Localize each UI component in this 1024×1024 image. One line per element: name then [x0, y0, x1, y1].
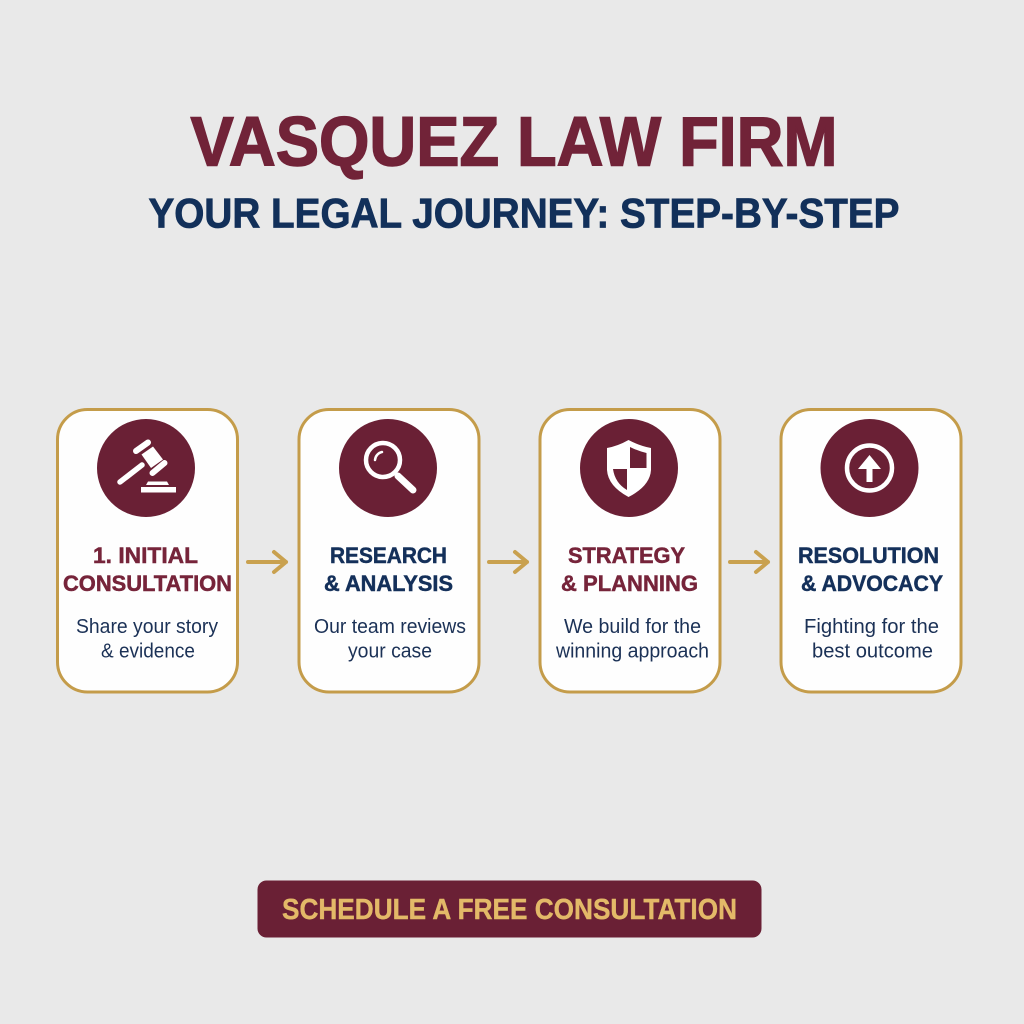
- icon: magnifying glass: [339, 419, 437, 517]
- call to action button: [258, 880, 762, 938]
- description: [555, 616, 709, 662]
- arrow: [248, 552, 286, 572]
- heading: RESEARCH: [330, 543, 447, 568]
- description: your case: [348, 640, 432, 662]
- description: [314, 616, 466, 662]
- arrow: [730, 552, 768, 572]
- icon: gavel: [97, 419, 195, 517]
- icon: up arrow in circle: [820, 419, 918, 517]
- description: Fighting for the: [804, 616, 939, 638]
- subtitle: YOUR LEGAL JOURNEY: STEP-BY-STEP: [148, 190, 900, 236]
- panel: step 3 strategy and planning: [540, 410, 720, 692]
- description: Our team reviews: [314, 616, 466, 638]
- call to action button: SCHEDULE A FREE CONSULTATION: [282, 894, 737, 926]
- arrow: [489, 552, 527, 572]
- heading: & ANALYSIS: [324, 571, 453, 596]
- description: [76, 616, 218, 662]
- heading: [561, 543, 698, 596]
- description: Share your story: [76, 616, 218, 638]
- heading: [63, 543, 232, 596]
- description: best outcome: [812, 640, 933, 662]
- heading: & ADVOCACY: [801, 571, 943, 596]
- panel: step 4 resolution and advocacy: [781, 410, 961, 692]
- description: & evidence: [101, 640, 195, 662]
- heading: RESOLUTION: [798, 543, 939, 568]
- heading: STRATEGY: [568, 543, 685, 568]
- heading: [798, 543, 943, 596]
- description: We build for the: [564, 616, 701, 638]
- title: VASQUEZ LAW FIRM: [190, 102, 838, 180]
- heading: CONSULTATION: [63, 571, 232, 596]
- description: winning approach: [555, 640, 709, 662]
- panel: step 2 research and analysis: [299, 410, 479, 692]
- heading: [324, 543, 453, 596]
- heading: & PLANNING: [561, 571, 698, 596]
- description: [804, 616, 939, 662]
- heading: 1. INITIAL: [93, 543, 198, 568]
- panel: step 1 initial consultation: [58, 410, 238, 692]
- icon: shield: [580, 419, 678, 517]
